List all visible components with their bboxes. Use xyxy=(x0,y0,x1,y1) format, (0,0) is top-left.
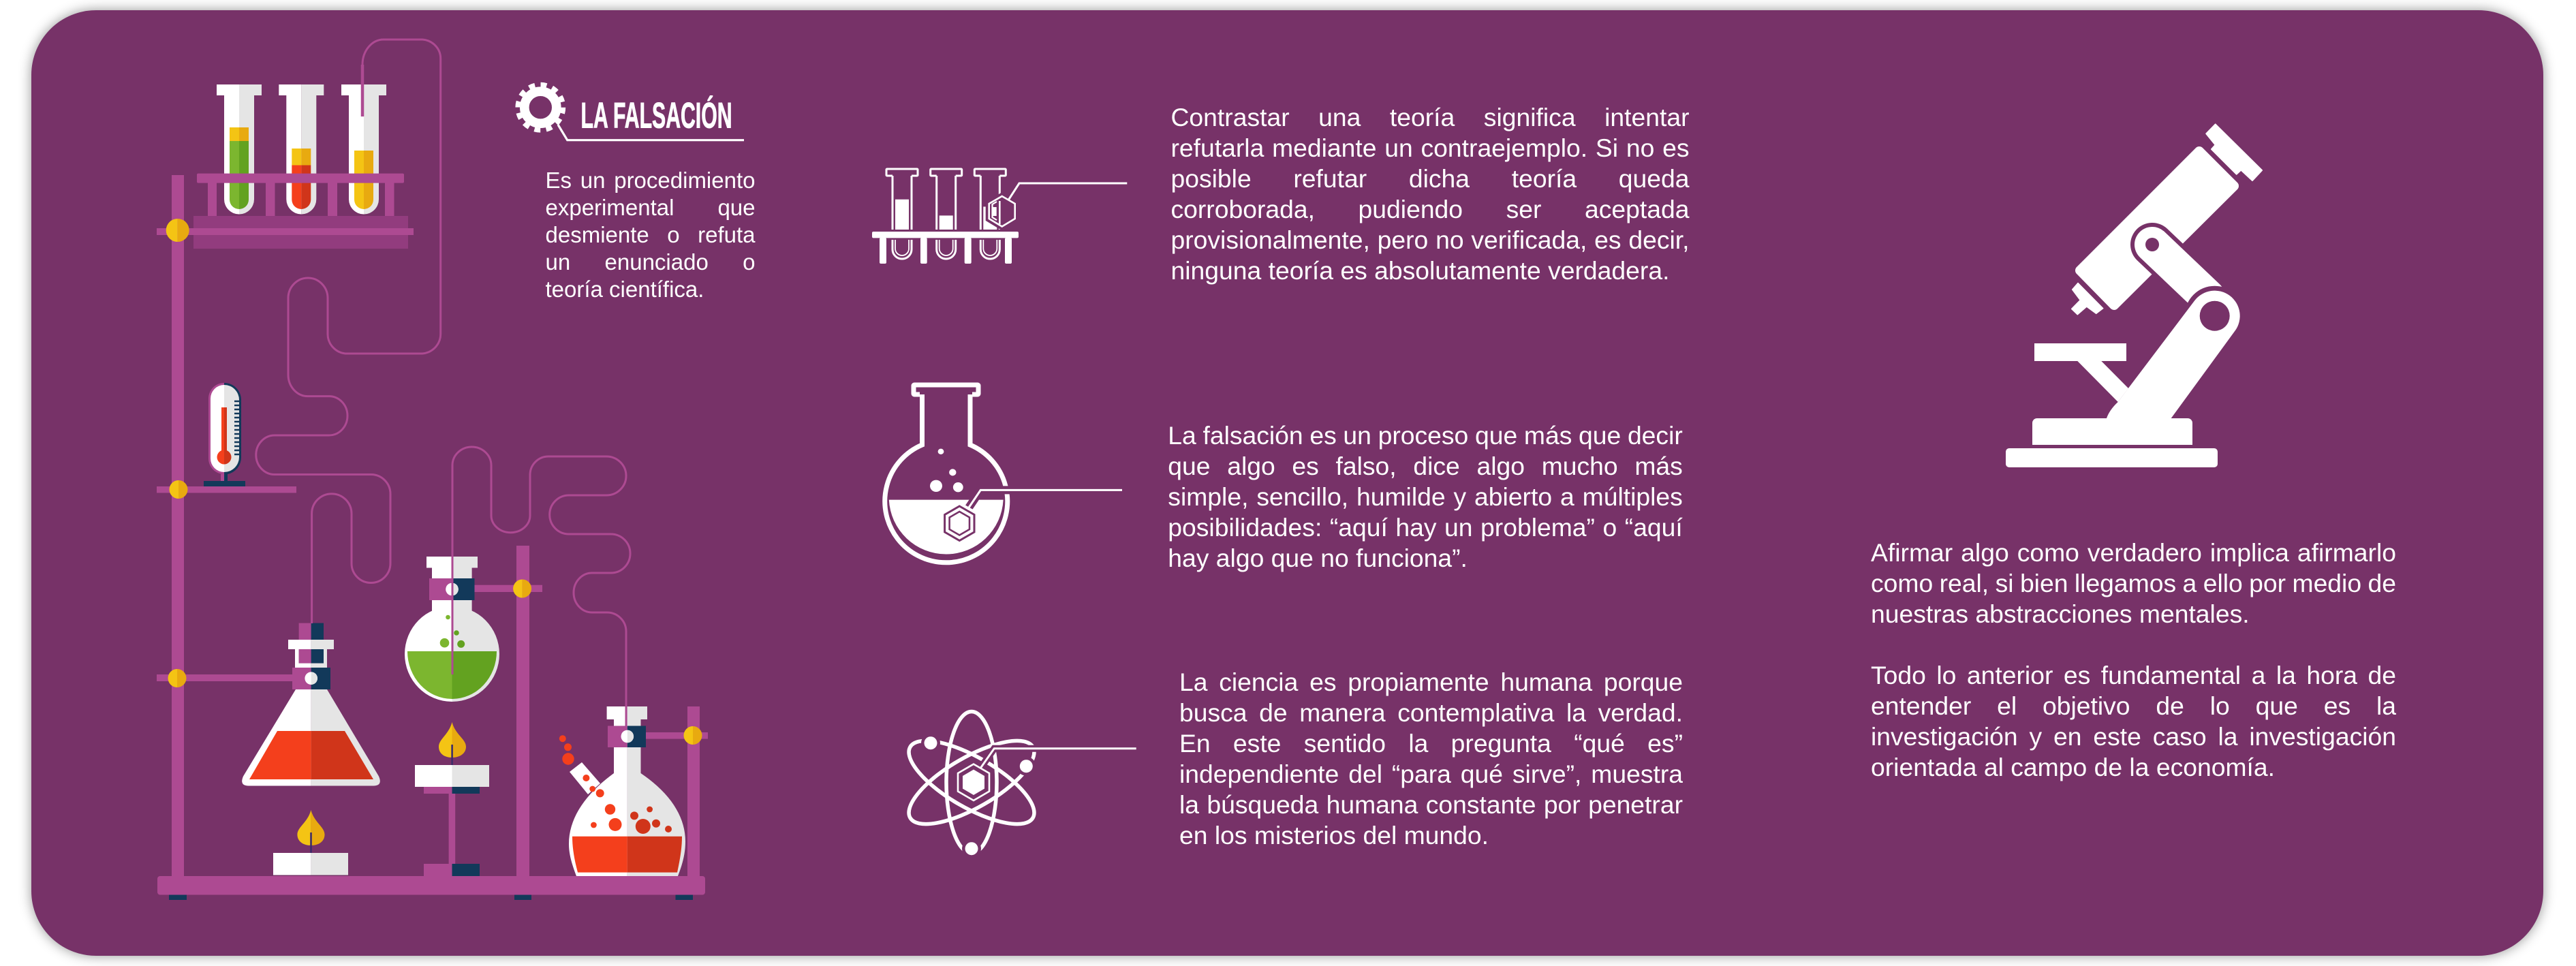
text: la ciencia es propiamente humana: La ciencia es propiamente humana porque xyxy=(1179,668,1683,696)
candle flame on stand xyxy=(415,722,489,876)
text: definition under heading: experimental que xyxy=(545,195,755,220)
stand: poles and base xyxy=(157,175,708,877)
text: la falsación es un proceso: que algo es falso, dice algo mucho más xyxy=(1168,452,1683,480)
text: contrastar una teoría: ninguna teoría es absolutamente verdadera. xyxy=(1170,256,1669,285)
icon: microscope xyxy=(2006,124,2262,467)
text: la falsación es un proceso: hay algo que no funciona”. xyxy=(1168,544,1468,572)
text: definition under heading: desmiente o refuta xyxy=(545,222,755,247)
icon: hexagon callout on atom xyxy=(956,749,1136,803)
boiling flask with red liquid xyxy=(559,706,685,876)
test tube rack xyxy=(157,174,414,249)
text: la ciencia es propiamente humana xyxy=(1179,668,1683,850)
icon: hexagon callout on tubes xyxy=(989,183,1127,226)
text: la falsación es un proceso: posibilidades: “aquí hay un problema” o “aquí xyxy=(1168,513,1683,542)
round flask with green liquid xyxy=(405,557,499,702)
text: la ciencia es propiamente humana: busca de manera contemplativa la verdad. xyxy=(1179,698,1683,727)
text: todo lo anterior es fundamental: investigación y en este caso la investigación xyxy=(1871,722,2396,751)
text: definition under heading xyxy=(545,168,755,302)
text: definition under heading: teoría científica. xyxy=(545,277,704,302)
yellow clamps xyxy=(166,219,702,745)
heading: La falsación: LA FALSACIÓN xyxy=(580,95,732,136)
icon: hexagon callout on flask xyxy=(940,490,1122,545)
text: todo lo anterior es fundamental xyxy=(1871,661,2396,781)
text: definition under heading: un enunciado o xyxy=(545,249,755,275)
text: contrastar una teoría: posible refutar dicha teoría queda xyxy=(1170,163,1690,192)
text: contrastar una teoría: provisionalmente, pero no verificada, es decir, xyxy=(1170,225,1690,253)
thermometer xyxy=(204,383,245,486)
text: afirmar algo como verdadero: como real, si bien llegamos a ello por medio de xyxy=(1871,569,2396,597)
text: contrastar una teoría: Contrastar una teoría significa intentar xyxy=(1170,102,1690,131)
test tube: yellow xyxy=(341,84,386,214)
test tube: red xyxy=(279,84,324,214)
candle flame on base xyxy=(273,810,348,875)
text: definition under heading: Es un procedimiento xyxy=(545,168,755,193)
icon: atom xyxy=(897,711,1136,858)
test tubes xyxy=(217,84,386,214)
text: contrastar una teoría: refutarla mediante un contraejemplo. Si no es xyxy=(1170,134,1690,162)
text: todo lo anterior es fundamental: orientada al campo de la economía. xyxy=(1871,753,2275,781)
conical flask with red liquid xyxy=(242,623,380,786)
icon: round flask outline xyxy=(885,385,1122,563)
text: la ciencia es propiamente humana: independiente del “para qué sirve”, muestra xyxy=(1179,760,1683,788)
test tube: green xyxy=(217,84,262,214)
text: todo lo anterior es fundamental: entender el objetivo de lo que es la xyxy=(1871,691,2396,720)
icon: test tubes outline xyxy=(872,169,1127,264)
text: la ciencia es propiamente humana: en los misterios del mundo. xyxy=(1179,821,1489,850)
text: la ciencia es propiamente humana: la búsqueda humana constante por penetrar xyxy=(1179,790,1683,819)
text: la ciencia es propiamente humana: En este sentido la pregunta “qué es” xyxy=(1179,729,1683,758)
illustration: laboratory stand xyxy=(157,40,708,900)
text: contrastar una teoría: corroborada, pudiendo ser aceptada xyxy=(1170,195,1690,223)
text: la falsación es un proceso: simple, sencillo, humilde y abierto a múltiples xyxy=(1168,482,1683,511)
heading icon: gear and underline xyxy=(518,84,744,140)
text: afirmar algo como verdadero: Afirmar algo como verdadero implica afirmarlo xyxy=(1871,538,2396,567)
text: la falsación es un proceso: La falsación es un proceso que más que decir xyxy=(1168,421,1683,450)
text: afirmar algo como verdadero xyxy=(1871,538,2396,628)
text: la falsación es un proceso xyxy=(1168,421,1683,572)
text: afirmar algo como verdadero: nuestras abstracciones mentales. xyxy=(1871,599,2250,628)
text: contrastar una teoría xyxy=(1170,102,1690,285)
tubing: wires connecting the glassware xyxy=(256,40,630,726)
text: todo lo anterior es fundamental: Todo lo anterior es fundamental a la hora de xyxy=(1871,661,2396,689)
base plate and feet xyxy=(157,876,705,900)
